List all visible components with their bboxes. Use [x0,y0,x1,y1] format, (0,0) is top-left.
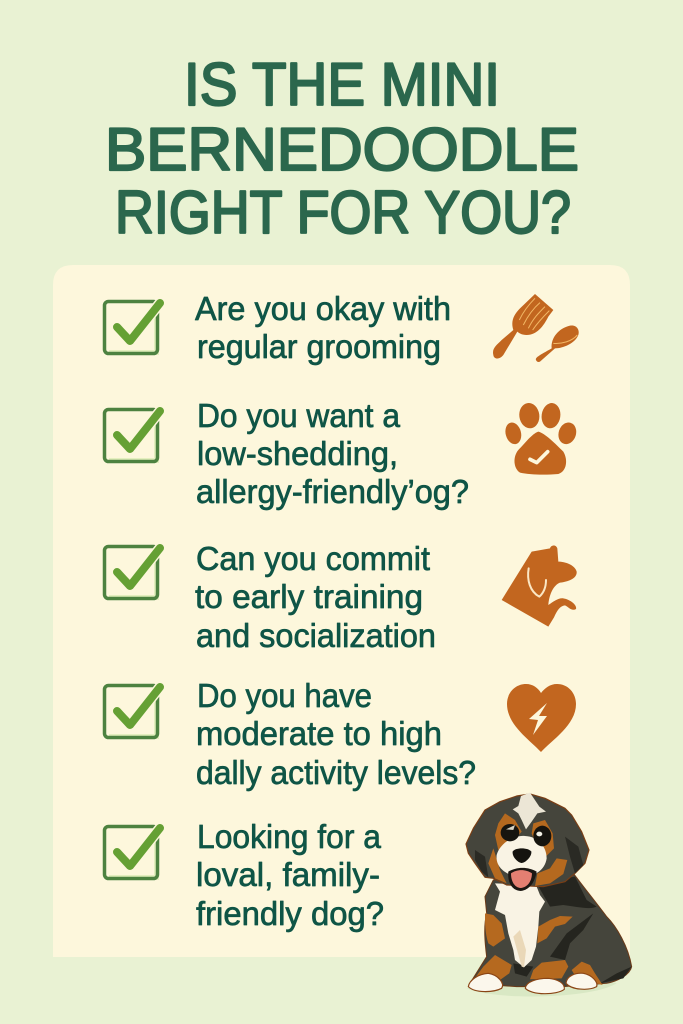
question 1 text: Are you okay with [195,290,451,327]
panel: checklist card [53,265,630,957]
icon: heart with bolt [507,684,576,752]
tan markings on chest and legs [485,913,505,947]
icon: grooming brushes [493,294,579,362]
icon: paw with check [503,402,579,475]
tan around eyes and cheeks [495,813,522,850]
checkbox 2 [104,410,160,463]
checklist item 3 [104,540,577,654]
question 1 text [195,290,451,365]
question 2 text: low-shedding, [197,435,398,472]
question 5 text [196,818,384,932]
ground shadow [467,977,617,997]
question 3 text: Can you commit [196,540,430,577]
illustration: Bernese puppy [466,793,632,997]
question 1 text: regular grooming [197,328,441,365]
black back shadows [513,877,632,983]
question 5 text: friendly dog? [196,895,384,932]
question 2 text [196,397,469,510]
checklist item 4 [104,677,576,791]
question 4 text: dally activity levels? [196,754,476,791]
head [466,794,589,887]
eyes [501,824,519,841]
question 2 text: allergy-friendly’og? [196,473,469,510]
question 5 text: loval, family- [196,856,380,893]
paws [468,973,503,992]
white muzzle [497,836,547,877]
checkbox 3 [104,546,160,600]
title: IS THE MINI [184,51,500,118]
nose [513,848,531,863]
body [470,873,632,987]
checkbox 1 [104,302,160,355]
checkbox 5 [104,826,160,880]
checklist item 5 [104,818,384,932]
question 5 text: Looking for a [197,818,382,855]
question 4 text [196,677,476,791]
question 3 text [195,540,436,654]
darker ear shadows [475,837,583,877]
checklist item 2 [104,397,579,510]
checklist item 1 [104,290,579,365]
white blaze [513,793,546,829]
title: RIGHT FOR YOU? [115,179,571,246]
question 3 text: and socialization [196,617,436,654]
question 4 text: moderate to high [196,715,442,752]
question 4 text: Do you have [197,677,372,714]
white bib [495,883,545,967]
title [105,51,579,246]
question 2 text: Do you want a [197,397,401,434]
question 3 text: to early training [195,578,423,615]
mouth and tongue [508,868,537,891]
title: BERNEDOODLE [105,116,579,183]
icon: dog silhouette [502,545,577,627]
checkbox 4 [104,686,160,739]
